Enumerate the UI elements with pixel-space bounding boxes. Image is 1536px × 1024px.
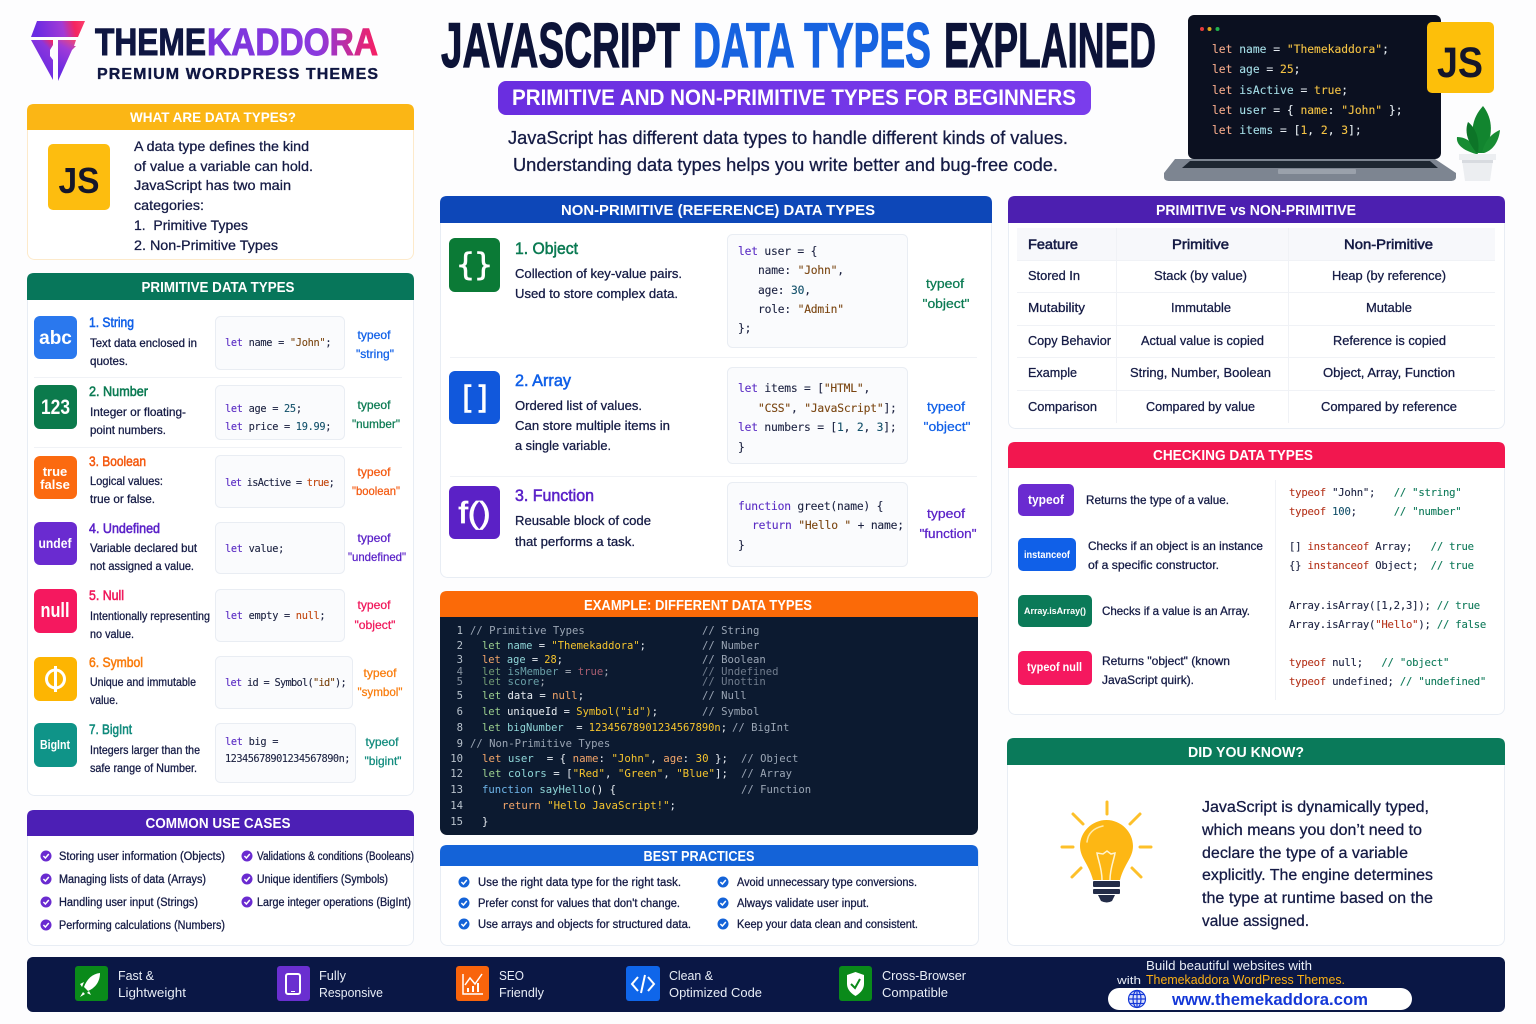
comparison table: Non-Primitive xyxy=(1344,236,1433,252)
feature: fully responsive xyxy=(277,966,383,1001)
panel header: PRIMITIVE DATA TYPES xyxy=(142,280,295,296)
row: boolean: typeof xyxy=(358,465,391,479)
laptop illustration xyxy=(1164,15,1500,181)
icon: T logo mark xyxy=(31,21,85,81)
row: symbol xyxy=(34,654,402,708)
logo: Themekaddora xyxy=(31,21,378,83)
comparison table: Mutable xyxy=(1366,300,1412,315)
code listing: let colors = ["Red", "Green", "Blue"]; xyxy=(482,768,728,780)
comparison table: String, Number, Boolean xyxy=(1130,365,1271,380)
comparison table: Example xyxy=(1028,365,1077,380)
row: typeof null: JavaScript quirk). xyxy=(1102,673,1194,687)
row: function: Reusable block of code xyxy=(515,513,651,528)
panel: example different data types xyxy=(440,591,978,835)
brand name: THEME xyxy=(95,22,206,64)
description text: categories: xyxy=(134,197,204,213)
row: undefined xyxy=(34,520,406,574)
row: Array.isArray: Array.isArray([1,2,3]); // true xyxy=(1289,600,1480,612)
icon: potted plant xyxy=(1457,106,1500,181)
icon: true false: true xyxy=(43,464,67,479)
fact text xyxy=(1201,799,1433,930)
row: bigint: Integers larger than the xyxy=(90,743,200,757)
intro text xyxy=(508,128,1068,175)
code listing: 2 xyxy=(457,640,463,652)
row: function: return "Hello " + name; xyxy=(752,519,904,532)
icon: 123: 123 xyxy=(41,396,70,419)
row: object: Used to store complex data. xyxy=(515,286,678,301)
panel: primitive vs non-primitive xyxy=(1008,196,1505,428)
row: instanceof: instanceof xyxy=(1024,549,1070,561)
feature: fast and lightweight: Fast & xyxy=(118,968,154,983)
comparison table: Heap (by reference) xyxy=(1332,268,1446,283)
code listing: // BigInt xyxy=(732,722,789,734)
fact text: value assigned. xyxy=(1202,913,1309,930)
row: instanceof: {} instanceof Object; // true xyxy=(1289,560,1474,572)
practices list: Use arrays and objects for structured data. xyxy=(478,919,691,931)
fact text: which means you don’t need to xyxy=(1201,822,1422,839)
code listing: // Undefined xyxy=(702,666,779,678)
panel: primitive data types xyxy=(27,273,414,796)
row: function xyxy=(449,482,977,566)
use case list: Handling user input (Strings) xyxy=(59,897,198,909)
practices list: Avoid unnecessary type conversions. xyxy=(737,877,917,889)
row: Array.isArray: Checks if a value is an Array. xyxy=(1102,604,1250,618)
row: Array.isArray xyxy=(1018,595,1486,631)
description text: of value a variable can hold. xyxy=(134,158,313,174)
row: typeof: typeof 100; // "number" xyxy=(1289,506,1461,518)
row: bigint: "bigint" xyxy=(364,754,402,768)
code listing: let bigNumber = 12345678901234567890n; xyxy=(482,722,727,734)
code listing: // Object xyxy=(741,753,798,765)
feature: clean code: Optimized Code xyxy=(669,985,762,1000)
code listing: // Boolean xyxy=(702,654,766,666)
row: bigint: let big = xyxy=(225,736,278,748)
row: symbol: "symbol" xyxy=(358,685,402,699)
feature: SEO friendly xyxy=(456,966,544,1001)
brand name xyxy=(95,22,378,64)
row: object: let user = { xyxy=(738,245,817,258)
code listing: 10 xyxy=(450,753,463,765)
feature: clean code: Clean & xyxy=(669,968,713,983)
row: Array.isArray: Array.isArray() xyxy=(1024,606,1086,617)
icon: JS logo xyxy=(48,144,110,210)
icon: brackets: ] xyxy=(474,380,492,416)
panel header xyxy=(27,810,414,836)
feature: fast and lightweight xyxy=(75,966,186,1001)
code listing: 4 xyxy=(457,666,463,678)
row: symbol: Unique and immutable xyxy=(90,675,196,689)
icon: BigInt: BigInt xyxy=(40,738,71,752)
row: object: }; xyxy=(738,322,751,335)
panel header: DID YOU KNOW? xyxy=(1188,745,1304,761)
row: string: "string" xyxy=(356,347,394,361)
comparison table: Copy Behavior xyxy=(1028,333,1112,348)
row: instanceof: of a specific constructor. xyxy=(1088,558,1219,572)
row: instanceof: Checks if an object is an instance xyxy=(1088,539,1263,553)
icon: true false: false xyxy=(40,477,70,492)
row: number: Integer or floating- xyxy=(90,405,186,419)
row: null: typeof xyxy=(358,598,391,612)
window dots xyxy=(1200,27,1220,31)
panel header xyxy=(440,845,978,866)
code listing: 9 xyxy=(457,738,463,750)
panel header: EXAMPLE: DIFFERENT DATA TYPES xyxy=(584,598,812,614)
row: object: name: "John", xyxy=(758,264,844,277)
icon: rocket xyxy=(75,966,108,1001)
comparison table: Compared by reference xyxy=(1321,399,1457,414)
code listing: 5 xyxy=(457,690,463,702)
panel: checking data types xyxy=(1008,442,1505,714)
row: object: Collection of key-value pairs. xyxy=(515,266,682,281)
panel: what are data types xyxy=(27,104,414,260)
row: string: 1. String xyxy=(89,314,134,330)
icon: braces: } xyxy=(474,247,493,283)
code listing: function sayHello() { xyxy=(482,784,616,796)
comparison table: Feature xyxy=(1028,236,1078,252)
screen code: let isActive = true; xyxy=(1212,84,1348,97)
comparison table: Mutability xyxy=(1028,300,1086,315)
row: bigint: 12345678901234567890n; xyxy=(225,753,350,765)
comparison table: Stored In xyxy=(1028,268,1080,283)
code listing: // Null xyxy=(702,690,747,702)
icon: chart xyxy=(456,966,489,1001)
title: DATA TYPES xyxy=(693,11,931,81)
row: string: let name = "John"; xyxy=(225,337,331,349)
comparison table: Comparison xyxy=(1028,399,1097,414)
comparison table: Object, Array, Function xyxy=(1323,365,1455,380)
icon: symbol xyxy=(34,657,77,701)
description text xyxy=(134,138,313,253)
screen code: let items = [1, 2, 3]; xyxy=(1212,124,1362,137)
row: function: 3. Function xyxy=(515,486,594,505)
use case list: Managing lists of data (Arrays) xyxy=(59,874,206,886)
row: symbol: let id = Symbol("id"); xyxy=(225,677,346,689)
feature: cross-browser: Cross-Browser xyxy=(882,968,967,983)
code listing: let score; xyxy=(482,676,546,688)
code listing: 6 xyxy=(457,706,463,718)
row: null: no value. xyxy=(90,627,134,641)
row: bigint: typeof xyxy=(366,735,399,749)
laptop base xyxy=(1164,159,1456,181)
code listing: // Unottin xyxy=(702,676,766,688)
code listing: } xyxy=(482,816,488,828)
panel header: COMMON USE CASES xyxy=(146,816,291,832)
row: array: let items = ["HTML", xyxy=(738,382,870,395)
panel: non-primitive data types xyxy=(440,196,992,578)
code listing: 13 xyxy=(450,784,463,796)
practices list: Keep your data clean and consistent. xyxy=(737,919,918,931)
intro text: Understanding data types helps you write better and bug-free code. xyxy=(513,155,1058,175)
call to action: with xyxy=(1116,975,1141,987)
code listing: let isMember = true; xyxy=(482,666,610,678)
row: instanceof xyxy=(1018,538,1474,572)
panel header: WHAT ARE DATA TYPES? xyxy=(130,109,296,125)
row: bigint: 7. BigInt xyxy=(89,721,132,737)
row: undefined: 4. Undefined xyxy=(89,520,160,536)
title: EXPLAINED xyxy=(944,11,1156,81)
row: bigint: safe range of Number. xyxy=(90,761,197,775)
description text: A data type defines the kind xyxy=(134,138,309,154)
row: typeof: typeof "John"; // "string" xyxy=(1289,487,1461,499)
icon: phone xyxy=(277,966,310,1001)
row: number: "number" xyxy=(352,417,400,431)
icon: true false xyxy=(34,456,77,499)
code listing: 14 xyxy=(450,800,463,812)
fact text: declare the type of a variable xyxy=(1202,845,1408,862)
row: array: } xyxy=(738,441,745,454)
panel: best practices xyxy=(440,845,978,946)
code listing: 15 xyxy=(450,816,463,828)
code listing: // Symbol xyxy=(702,706,759,718)
row: typeof: typeof xyxy=(1028,493,1065,507)
fact text: JavaScript is dynamically typed, xyxy=(1202,799,1429,816)
row: number: let age = 25; xyxy=(225,403,302,415)
row: typeof null: typeof null xyxy=(1027,660,1082,674)
icon: f(): f() xyxy=(458,495,490,530)
use case list xyxy=(40,850,414,932)
row: null: 5. Null xyxy=(89,587,124,603)
fact text: explicitly. The engine determines xyxy=(1202,867,1433,884)
row: typeof xyxy=(1018,484,1461,518)
row: function: "function" xyxy=(920,526,977,541)
row: object: 1. Object xyxy=(515,239,578,258)
row: object: typeof xyxy=(926,276,964,291)
row: function: that performs a task. xyxy=(515,534,635,549)
code listing: // String xyxy=(702,625,759,637)
code listing xyxy=(450,625,811,828)
row: number: typeof xyxy=(358,398,391,412)
title: JAVASCRIPT xyxy=(441,11,680,81)
row: typeof null: typeof undefined; // "undefined" xyxy=(1289,676,1486,688)
code listing: // Primitive Types xyxy=(470,625,585,637)
code listing: let name = "Themekaddora"; xyxy=(482,640,646,652)
icon: JS badge xyxy=(1427,22,1494,93)
description text: 2. Non-Primitive Types xyxy=(134,237,278,253)
comparison table: Immutable xyxy=(1171,300,1231,315)
feature: SEO friendly: Friendly xyxy=(499,985,544,1000)
row: typeof null xyxy=(1018,651,1486,688)
website pill: www.themekaddora.com xyxy=(1171,990,1368,1009)
icon: light bulb xyxy=(1062,802,1151,902)
panel header xyxy=(27,273,414,300)
row: string: quotes. xyxy=(90,354,128,368)
footer bar xyxy=(27,957,1505,1012)
subtitle badge xyxy=(498,81,1091,115)
comparison table: Compared by value xyxy=(1146,399,1255,414)
code listing: 8 xyxy=(457,722,463,734)
icon: 123 xyxy=(34,385,77,429)
description text: 1. Primitive Types xyxy=(134,217,248,233)
row: object: role: "Admin" xyxy=(758,303,844,316)
row: array: Ordered list of values. xyxy=(515,398,642,413)
icon: abc: abc xyxy=(39,328,72,349)
icon: braces: { xyxy=(456,247,475,283)
row: array: "object" xyxy=(924,419,971,434)
code listing: 3 xyxy=(457,654,463,666)
row: array: a single variable. xyxy=(515,438,611,453)
panel: did you know xyxy=(1007,738,1505,946)
row: number: 2. Number xyxy=(89,383,148,399)
code listing: let age = 28; xyxy=(482,654,563,666)
call to action: Themekaddora WordPress Themes. xyxy=(1146,972,1345,987)
practices list xyxy=(458,876,918,931)
code listing: let data = null; xyxy=(482,690,584,702)
panel header xyxy=(27,104,414,130)
row: boolean: Logical values: xyxy=(90,474,163,488)
row: null xyxy=(34,587,396,642)
row: string: typeof xyxy=(358,328,391,342)
panel header xyxy=(1008,442,1505,468)
code listing: 1 xyxy=(457,625,463,637)
website pill xyxy=(1108,988,1412,1010)
call to action xyxy=(1108,958,1412,1010)
code listing: return "Hello JavaScript!"; xyxy=(502,800,676,812)
row: boolean: let isActive = true; xyxy=(225,477,334,489)
row: bigint xyxy=(34,721,402,782)
row: array: 2. Array xyxy=(515,371,571,390)
use case list: Performing calculations (Numbers) xyxy=(59,920,225,932)
brand name: KADDORA xyxy=(207,22,378,64)
row: instanceof: [] instanceof Array; // true xyxy=(1289,541,1474,553)
feature: fast and lightweight: Lightweight xyxy=(118,985,186,1000)
feature: fully responsive: Fully xyxy=(319,968,346,983)
row: array: let numbers = [1, 2, 3]; xyxy=(738,421,896,434)
panel header: CHECKING DATA TYPES xyxy=(1153,448,1313,464)
icon: undef xyxy=(34,522,77,565)
row: symbol: typeof xyxy=(364,666,397,680)
row: number: point numbers. xyxy=(90,423,166,437)
row: boolean xyxy=(34,453,400,508)
panel: common use cases xyxy=(27,810,414,946)
icon: shield xyxy=(839,966,872,1001)
icon: abc xyxy=(34,316,77,359)
row: undefined: "undefined" xyxy=(348,550,406,564)
feature: cross-browser xyxy=(839,966,967,1001)
panel header xyxy=(440,591,978,617)
tagline: PREMIUM WORDPRESS THEMES xyxy=(97,66,378,83)
icon: code tag xyxy=(626,966,660,1001)
feature: clean code xyxy=(626,966,762,1001)
panel header: BEST PRACTICES xyxy=(644,849,755,865)
row: null: let empty = null; xyxy=(225,610,325,622)
icon: BigInt xyxy=(34,723,77,767)
panel header: PRIMITIVE vs NON-PRIMITIVE xyxy=(1156,203,1356,219)
code listing: // Array xyxy=(741,768,792,780)
row: function: } xyxy=(738,539,745,552)
row: undefined: not assigned a value. xyxy=(90,559,194,573)
row: array: typeof xyxy=(927,399,965,414)
row: boolean: "boolean" xyxy=(352,484,400,498)
call to action: Build beautiful websites with xyxy=(1146,958,1312,973)
icon: brackets xyxy=(449,371,500,424)
laptop screen xyxy=(1188,15,1441,159)
code listing: // Non-Primitive Types xyxy=(470,738,610,750)
use case list: Unique identifiers (Symbols) xyxy=(257,874,388,886)
row: array: Can store multiple items in xyxy=(515,418,670,433)
icon: braces xyxy=(449,238,500,292)
row: boolean: 3. Boolean xyxy=(89,453,146,469)
use case list: Validations & conditions (Booleans) xyxy=(257,851,414,863)
row: string xyxy=(34,314,394,370)
row: typeof null: Returns "object" (known xyxy=(1102,654,1230,668)
code listing: 12 xyxy=(450,768,463,780)
practices list: Prefer const for values that don't change. xyxy=(478,898,680,910)
code listing: let user = { name: "John", age: 30 }; xyxy=(482,753,728,765)
row: array xyxy=(449,368,971,464)
comparison table: Primitive xyxy=(1172,236,1229,252)
code listing: 5 xyxy=(457,676,463,688)
title xyxy=(441,11,1156,81)
panel header: NON-PRIMITIVE (REFERENCE) DATA TYPES xyxy=(561,203,875,219)
row: Array.isArray: Array.isArray("Hello"); // false xyxy=(1289,619,1486,631)
row: typeof: Returns the type of a value. xyxy=(1086,493,1229,507)
row: undefined: let value; xyxy=(225,543,284,555)
icon: f() xyxy=(449,486,500,539)
practices list: Always validate user input. xyxy=(737,898,869,910)
row: string: Text data enclosed in xyxy=(90,336,197,350)
icon: JS badge: JS xyxy=(1437,39,1483,87)
row: object: age: 30, xyxy=(758,284,811,297)
row: function: function greet(name) { xyxy=(738,500,883,513)
row: number xyxy=(34,383,400,440)
row: undefined: Variable declared but xyxy=(90,541,198,555)
row: boolean: true or false. xyxy=(90,492,155,506)
row: array: "CSS", "JavaScript"]; xyxy=(758,402,897,415)
feature: fully responsive: Responsive xyxy=(319,985,383,1000)
comparison table: Actual value is copied xyxy=(1141,333,1264,348)
description text: JavaScript has two main xyxy=(134,177,291,193)
use case list: Large integer operations (BigInt) xyxy=(257,897,411,909)
use case list: Storing user information (Objects) xyxy=(59,851,225,863)
screen code: let name = "Themekaddora"; xyxy=(1212,43,1389,56)
screen code: let user = { name: "John" }; xyxy=(1212,104,1402,117)
icon: JS logo: JS xyxy=(58,160,100,201)
comparison table: Stack (by value) xyxy=(1154,268,1247,283)
row: typeof null: typeof null; // "object" xyxy=(1289,657,1449,669)
code listing: // Function xyxy=(741,784,811,796)
icon: null xyxy=(34,589,77,633)
row: symbol: 6. Symbol xyxy=(89,654,143,670)
icon: null: null xyxy=(40,600,70,622)
row: symbol: value. xyxy=(90,693,118,707)
subtitle badge: PRIMITIVE AND NON-PRIMITIVE TYPES FOR BEGINNERS xyxy=(512,85,1076,110)
practices list: Use the right data type for the right task. xyxy=(478,877,681,889)
row: object: "object" xyxy=(922,296,970,311)
panel header xyxy=(1007,738,1505,765)
feature: SEO friendly: SEO xyxy=(499,968,524,983)
fact text: the type at runtime based on the xyxy=(1202,890,1433,907)
comparison table: Reference is copied xyxy=(1333,333,1446,348)
row: undefined: typeof xyxy=(358,531,391,545)
panel header xyxy=(440,196,992,223)
icon: undef: undef xyxy=(38,535,72,551)
intro text: JavaScript has different data types to handle different kinds of values. xyxy=(508,128,1068,148)
row: null: Intentionally representing xyxy=(90,609,210,623)
code listing: // Number xyxy=(702,640,759,652)
row: null: "object" xyxy=(354,618,396,632)
screen code: let age = 25; xyxy=(1212,63,1300,76)
screen code xyxy=(1212,43,1402,137)
panel header xyxy=(1008,196,1505,223)
row: function: typeof xyxy=(927,506,965,521)
comparison table xyxy=(1017,228,1495,423)
icon: brackets: [ xyxy=(458,380,476,416)
row: number: let price = 19.99; xyxy=(225,421,331,433)
code listing: let uniqueId = Symbol("id"); xyxy=(482,706,658,718)
row: object xyxy=(449,234,970,348)
feature: cross-browser: Compatible xyxy=(882,985,948,1000)
